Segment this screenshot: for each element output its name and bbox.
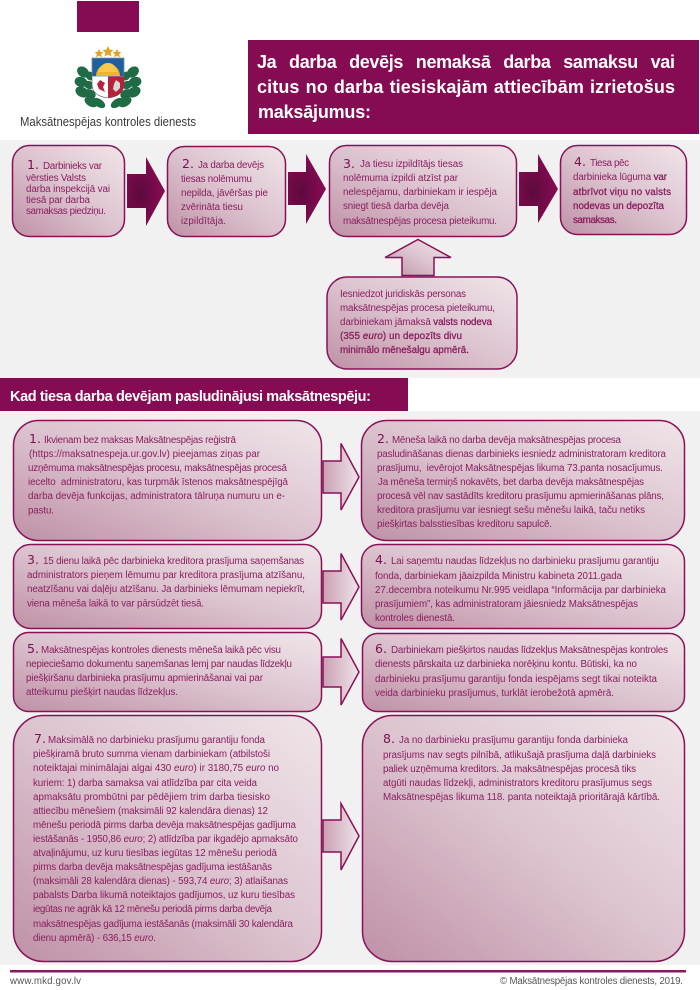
step 2 text: Ja darba devējs	[198, 160, 264, 171]
item 5 text	[26, 641, 292, 698]
item 6 text: 6.	[375, 641, 387, 656]
item 2 text: pasludināšanas dienas darbinieks iesniedz administratoram kreditora	[377, 449, 667, 460]
item 1 text: (https://maksatnespeja.ur.gov.lv) pieejamas ziņas par	[29, 449, 261, 460]
item 4 text: Lai saņemtu naudas līdzekļus no darbinieku prasījumu garantiju	[391, 556, 659, 567]
footer: copyright: © Maksātnespējas kontroles dienests, 2019.	[500, 976, 683, 987]
arrow: step 3 to step 4	[519, 154, 558, 223]
title text	[257, 52, 675, 122]
item 7 text: pabalsts Darba likumā noteiktajos gadījumos, uz kuru tiesības	[33, 890, 295, 901]
item 7 text: piešķiramā bruto summa vienam darbiniekam (atbilstoši	[33, 749, 270, 760]
step 4 text: samaksas.	[573, 215, 617, 226]
decorative top tab	[77, 1, 139, 32]
step 1 text: darba inspekcijā vai	[26, 184, 110, 195]
item 8 text: 8.	[383, 731, 395, 746]
item 1 text: darba devēja funkcijas, administratora tālruņa numuru un e-	[28, 491, 285, 502]
panel: item 2	[362, 420, 684, 540]
organisation name: Maksātnespējas kontroles dienests	[20, 115, 196, 129]
item 7 text: iestāšanās - 1950,86 euro; 2) atlīdzība par ikgadējo apmaksāto	[33, 834, 299, 845]
item 6 text: Darbiniekam piešķirtos naudas līdzekļus Maksātnespējas kontroles	[391, 645, 668, 656]
arrow: item 7 to item 8	[323, 804, 359, 870]
note text: maksātnespējas procesa pieteikumu,	[340, 303, 495, 314]
panel: step 1	[12, 146, 124, 236]
item 5 text: atteikumu piešķirt naudas līdzekļus.	[26, 687, 178, 698]
arrow: item 1 to item 2	[323, 444, 359, 510]
item 3 text: administrators pieņem lēmumu par kreditora prasījuma atzīšanu,	[27, 570, 305, 581]
icon: coat of arms	[73, 46, 143, 110]
step 1 text: Darbinieks var	[43, 161, 103, 172]
item 4 text: kontroles dienestā.	[375, 613, 455, 624]
arrow: item 3 to item 4	[323, 554, 359, 620]
item 2 text: prasījumu, ievērojot Maksātnespējas likuma 73.panta nosacījumus.	[377, 463, 663, 474]
item 7 text: atvaļinājumu, uz kuru tiesības iegūtas 12 mēnešu periodā	[33, 848, 278, 859]
step 2 text: zvērināta tiesu	[181, 202, 243, 213]
title banner	[248, 40, 699, 134]
note text: Iesniedzot juridiskās personas	[340, 289, 466, 300]
arrow: step 1 to step 2	[127, 157, 165, 226]
item 1 text: 1.	[29, 431, 41, 446]
item 1 text: pastu.	[28, 506, 54, 516]
step 4 text: Tiesa pēc	[590, 158, 629, 169]
panel: item 8	[362, 716, 684, 962]
item 2 text: piešķirtas balsstiesības kreditoru sapulcē.	[377, 519, 552, 530]
step 1 text: 1.	[27, 157, 39, 172]
panel: item 6	[362, 634, 684, 712]
item 7 text: 7.	[34, 731, 46, 746]
panel: application fee note	[327, 277, 517, 369]
item 1 text: uzņēmuma maksātnespējas procesu, maksātnespējas procesā	[28, 463, 288, 474]
item 4 text: 4.	[375, 552, 387, 567]
footer: website: www.mkd.gov.lv	[9, 976, 81, 987]
step 4 text: 4.	[574, 154, 586, 169]
step 3 text: nelespējamu, darbiniekam ir iespēja	[343, 187, 498, 198]
step 3 text: nolēmuma izpildi atzīst par	[343, 173, 459, 184]
step 1 text	[26, 157, 110, 217]
item 2 text: 2.	[377, 431, 389, 446]
step 3 text: sniegt tiesā darba devēja	[343, 201, 450, 212]
step 4 text: nodevas un depozīta	[573, 201, 665, 212]
section heading text: Kad tiesa darba devējam pasludinājusi maksātnespēju:	[10, 389, 371, 405]
arrow: note up to step 3	[385, 240, 451, 276]
panel: item 7	[14, 716, 322, 962]
title text: maksājumus:	[258, 102, 371, 122]
item 4 text: 27.decembra noteikumu Nr.995 veidlapa “Informācija par darbinieka	[375, 585, 667, 596]
item 3 text: 15 dienu laikā pēc darbinieka kreditora prasījuma saņemšanas	[43, 556, 304, 567]
item 3 text	[27, 552, 305, 610]
item 1 text	[28, 431, 289, 516]
panel: step 3	[330, 146, 516, 236]
item 4 text: fonda, darbiniekam jāaizpilda Ministru kabineta 2011.gada	[375, 571, 623, 582]
logo: coat of arms and organisation name	[20, 46, 196, 129]
item 7 text: pirms darba devēja maksātnespējas gadījuma iestāšanās	[33, 862, 272, 873]
item 2 text: Mēneša laikā no darba devēja maksātnespējas procesa	[392, 435, 622, 446]
item 7 text: maksātnespējas gadījuma iestāšanās (maksimāli 30 kalendāra	[33, 919, 294, 930]
step 2 text: nepilda, jāvēršas pie	[181, 188, 269, 199]
item 3 text: viena mēneša laikā to var pārsūdzēt tiesā.	[27, 598, 204, 610]
item 8 text: Maksātnespējas likuma 118. panta noteiktajā prioritārajā kārtībā.	[383, 792, 660, 803]
step 3 text: 3.	[343, 156, 355, 171]
item 6 text	[375, 641, 668, 699]
step 2 text	[181, 156, 269, 227]
step 3 text: Ja tiesu izpildītājs tiesas	[360, 159, 463, 170]
item 5 text: nepieciešamo dokumentu saņemšanas lemj par naudas līdzekļu	[26, 659, 292, 670]
item 8 text	[383, 731, 660, 803]
arrow: step 2 to step 3	[288, 154, 326, 224]
item 5 text: Maksātnespējas kontroles dienests mēneša laikā pēc visu	[41, 645, 281, 656]
item 8 text: Ja no darbinieku prasījumu garantiju fonda darbinieka	[399, 735, 629, 746]
item 8 text: paliek uzņēmuma kreditors. Ja maksātnespējas procesā tiks	[383, 764, 636, 775]
panel: item 4	[362, 544, 684, 628]
panel: item 5	[14, 632, 322, 712]
step 4 text	[573, 154, 671, 226]
item 2 text: kreditora prasījumu var iesniegt sešu mēnešu laikā, taču netiks	[377, 505, 645, 516]
step 4 text: atbrīvot viņu no valsts	[573, 187, 671, 198]
item 2 text	[377, 431, 667, 530]
item 4 text	[375, 552, 667, 624]
item 7 text: iegūtas ne agrāk kā 12 mēnešu periodā pirms darba devēja	[33, 904, 273, 915]
step 1 text: samaksas piedziņu.	[26, 206, 106, 217]
item 7 text: noteiktajai minimālajai algai 430 euro) ir 3180,75 euro no	[33, 763, 280, 774]
section heading banner	[0, 378, 408, 411]
item 7 text	[33, 731, 299, 944]
item 6 text: darbinieku prasījumu garantiju fonda iespējams segt tikai noteikta	[375, 674, 658, 685]
item 7 text: (maksimāli 28 kalendāra dienas) - 593,74 euro; 3) atlaišanas	[33, 876, 288, 887]
item 1 text: iecelto administratoru, kas turpmāk īstenos maksātnespējīgā	[28, 477, 289, 488]
item 2 text: Ja mēneša termiņš nokavēts, bet darba devēja maksātnespējas	[378, 477, 644, 488]
item 7 text: mēnešu periodā pirms darba devēja maksātnespējas gadījuma	[33, 820, 297, 831]
step 4 text: darbinieka lūguma var	[573, 172, 668, 183]
panel: step 4	[560, 146, 686, 234]
item 7 text: attiecību mēnešiem (maksimāli 92 kalendāra dienas) 12	[33, 806, 268, 817]
item 7 text: dienu apmērā) - 636,15 euro.	[33, 933, 156, 944]
note text	[340, 289, 495, 356]
item 8 text: atgūti naudas līdzekļi, administrators kreditoru prasījumus segs	[383, 778, 652, 789]
panel: step 2	[168, 146, 286, 236]
title text: Ja darba devējs nemaksā darba samaksu vai	[257, 52, 675, 72]
item 3 text: 3.	[27, 552, 39, 567]
step 2 text: izpildītāja.	[181, 216, 226, 227]
panel: item 3	[14, 544, 322, 628]
title text: citus no darba tiesiskajām attiecībām izrietošus	[257, 77, 675, 97]
item 7 text: Maksimālā no darbinieku prasījumu garantiju fonda	[48, 735, 266, 746]
step 2 text: 2.	[182, 156, 194, 171]
item 2 text: procesā vēl nav sastādīts kreditoru prasījumu apmierināšanas plāns,	[377, 491, 664, 502]
item 5 text: piešķiršanu darbinieka prasījumu apmierināšanai vai par	[26, 673, 264, 684]
item 6 text: veida darbinieku prasījumus, turklāt ierobežotā apmērā.	[375, 688, 614, 699]
arrow: item 5 to item 6	[323, 638, 359, 705]
step 3 text	[343, 156, 498, 227]
step 1 text: tiesā par darba	[26, 195, 91, 206]
item 7 text: kuriem: 1) darba samaksa vai atlīdzība par cita veida	[33, 778, 258, 789]
item 3 text: neatzīšanu vai daļēju atzīšanu. Ja darbinieks lēmumam nepiekrīt,	[27, 584, 305, 595]
note text: minimālo mēnešalgu apmērā.	[340, 345, 469, 356]
item 4 text: prasījumiem”, kas administratoram jāiesniedz Maksātnespējas	[375, 599, 638, 610]
step 1 text: vērsties Valsts	[26, 173, 86, 184]
note text: darbiniekam jāmaksā valsts nodeva	[340, 317, 493, 328]
item 6 text: dienests pārskaita uz darbinieka norēķinu kontu. Būtiski, ka no	[375, 659, 638, 670]
item 5 text: 5.	[27, 641, 39, 656]
panel: item 1	[14, 420, 322, 540]
step 2 text: tiesas nolēmumu	[181, 174, 252, 185]
item 8 text: prasījums nav segts pilnībā, atlikušajā prasījuma daļā darbinieks	[383, 750, 656, 761]
note text: (355 euro) un depozīts divu	[340, 331, 462, 342]
item 1 text: Ikvienam bez maksas Maksātnespējas reģistrā	[44, 435, 237, 446]
item 7 text: apmaksātu prombūtni par pēdējiem trim darba tiesisko	[33, 792, 271, 803]
step 3 text: maksātnespējas procesa pieteikumu.	[343, 216, 497, 227]
